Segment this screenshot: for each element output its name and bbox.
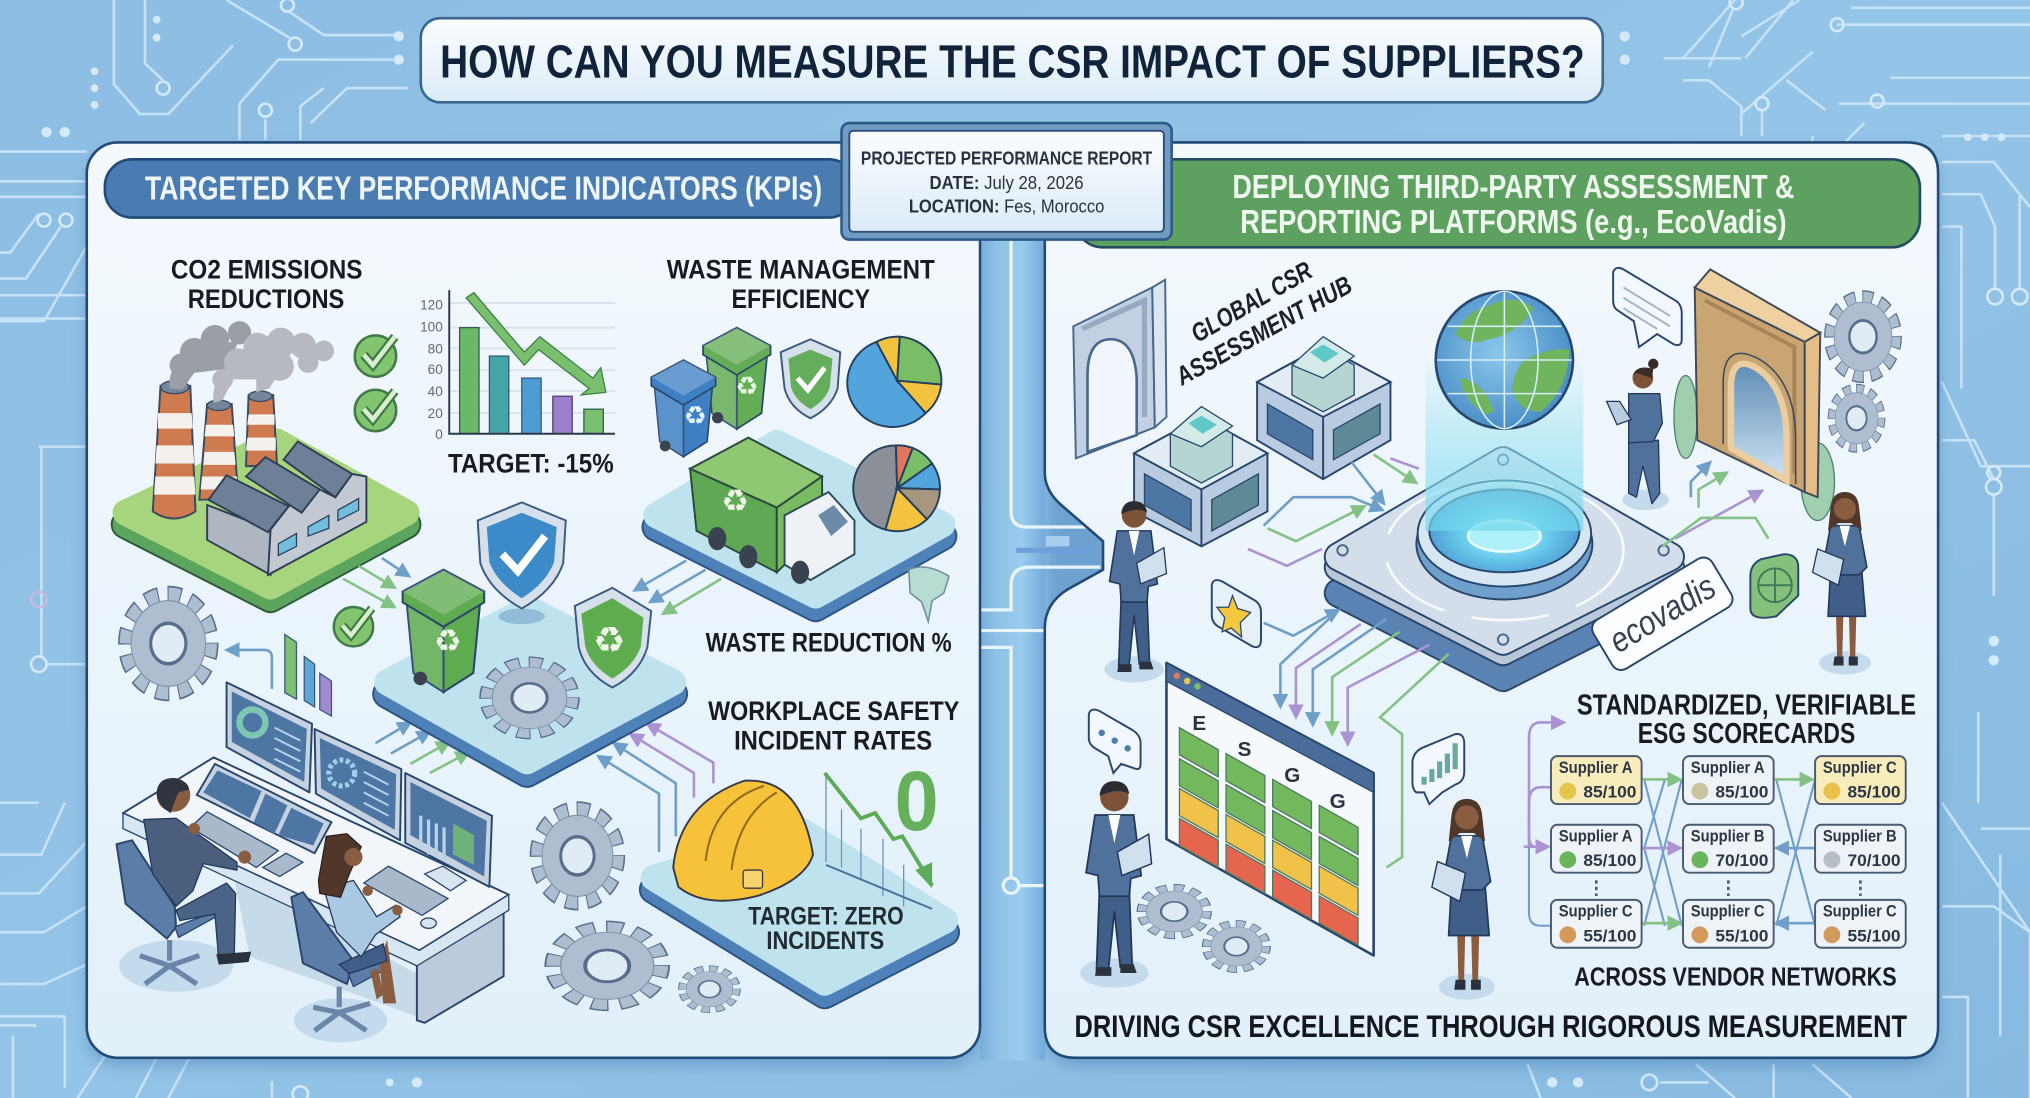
- card: supplier C first: 55/100: [1583, 926, 1636, 945]
- report info box: [842, 123, 1172, 240]
- card: supplier C third: 55/100: [1847, 926, 1901, 945]
- icon: server cube back: [1257, 337, 1390, 479]
- mini bars: [285, 634, 331, 716]
- icon: orange arch: [1695, 269, 1820, 497]
- table: ESG scorecard: S: [1238, 738, 1251, 761]
- icon: recycling bins: [651, 328, 771, 457]
- icon: checks: [355, 335, 396, 431]
- icon: gears top right: [1830, 297, 1896, 447]
- bar chart: 80: [428, 342, 443, 357]
- card: supplier C yellow: Supplier C: [1823, 759, 1897, 777]
- heading: waste management: [667, 253, 935, 314]
- bar chart: 120: [420, 297, 443, 312]
- heading: workplace safety: INCIDENT RATES: [734, 725, 932, 756]
- table: ESG scorecard: G: [1330, 790, 1346, 813]
- icon: truck on blue platform: [656, 438, 942, 607]
- rotated label: global hub: ASSESSMENT HUB: [1171, 271, 1357, 392]
- label: waste reduction: WASTE REDUCTION %: [706, 626, 952, 657]
- heading: waste management: WASTE MANAGEMENT: [667, 253, 935, 284]
- bar chart: 40: [428, 384, 443, 399]
- rotated label: global hub: GLOBAL CSR: [1187, 257, 1317, 348]
- figure: man left: [1104, 501, 1166, 682]
- icon: large gear left: [126, 595, 211, 692]
- icon: platform gear: [487, 663, 572, 733]
- icon: check: [334, 607, 373, 646]
- arrows: servers to hub: [1248, 454, 1419, 566]
- pie chart: waste types: [853, 445, 940, 531]
- icon: green bin: ♻: [434, 623, 462, 659]
- title banner: HOW CAN YOU MEASURE THE CSR IMPACT OF SUPPLIERS?: [440, 36, 1585, 88]
- heading: workplace safety: WORKPLACE SAFETY: [708, 695, 959, 726]
- card: supplier C third: Supplier C: [1823, 903, 1897, 921]
- icon: plants: [1674, 376, 1835, 521]
- card: supplier B green: 70/100: [1715, 851, 1768, 870]
- icon: green bin: [403, 570, 484, 692]
- icon: globe: [1436, 291, 1573, 429]
- heading: CO2 emissions: CO2 EMISSIONS: [171, 253, 363, 284]
- icon: map pin: [909, 567, 949, 622]
- card: supplier B grey: [1815, 825, 1906, 873]
- table: ESG scorecard: E: [1192, 712, 1206, 735]
- icon: star tile: [1212, 580, 1261, 647]
- card: supplier A yellow: Supplier A: [1559, 759, 1633, 777]
- card: supplier A grey: 85/100: [1715, 783, 1768, 802]
- icon: chat bubble: [1089, 710, 1141, 773]
- icon: truck on blue platform: ♻: [721, 483, 749, 519]
- bar chart: 20: [428, 406, 443, 421]
- icon: trend bubble: [1412, 734, 1464, 804]
- icon: server cube front: [1134, 407, 1267, 546]
- heading: CO2 emissions: [171, 253, 362, 314]
- heading: scorecards: ESG SCORECARDS: [1638, 718, 1855, 750]
- heading bar: KPIs: [105, 159, 856, 218]
- title banner: [421, 18, 1603, 102]
- table: ESG scorecard: G: [1284, 764, 1300, 787]
- heading: scorecards: STANDARDIZED, VERIFIABLE: [1577, 690, 1916, 722]
- report info box: LOCATION: Fes, Morocco: [909, 196, 1104, 216]
- central connector channel: [980, 240, 1100, 1060]
- heading: scorecards: [1577, 690, 1916, 750]
- card: supplier C third: [1815, 900, 1906, 948]
- icon: recycling bins: ♻: [735, 372, 759, 402]
- label: across vendor networks: ACROSS VENDOR NETWORKS: [1574, 963, 1897, 991]
- heading: waste management: EFFICIENCY: [731, 283, 870, 314]
- big zero: 0: [895, 754, 939, 848]
- figure: woman right: [1812, 492, 1871, 675]
- card: supplier B green: Supplier B: [1691, 828, 1765, 846]
- card: supplier C yellow: [1815, 756, 1906, 804]
- icon: small gears: [1142, 888, 1266, 969]
- figure: standing woman top: [1607, 359, 1669, 510]
- icon: recycle shield: ♻: [593, 619, 625, 662]
- light beam: [1425, 350, 1583, 531]
- illustration: control desk with operators: [117, 682, 509, 1042]
- card: supplier A yellow: [1551, 756, 1642, 804]
- report info box: PROJECTED PERFORMANCE REPORT: [861, 148, 1152, 168]
- card: supplier C yellow: 85/100: [1847, 783, 1901, 802]
- pie chart: waste share: [847, 337, 941, 427]
- panel: right assessment platforms: [1016, 142, 1938, 1058]
- icon: gears bottom: [537, 810, 736, 1009]
- bar chart: 0: [435, 427, 443, 442]
- icon: grey arch: [1073, 280, 1166, 458]
- card: supplier C second: 55/100: [1715, 926, 1768, 945]
- card: supplier A yellow: 85/100: [1583, 783, 1636, 802]
- icon: speech bubble: [1613, 268, 1682, 347]
- arrows: hub to table: [1264, 610, 1449, 867]
- card: supplier C second: [1683, 900, 1774, 948]
- icon: recycle shield: [575, 588, 651, 688]
- card: supplier A grey: Supplier A: [1691, 759, 1765, 777]
- heading: workplace safety: [708, 695, 959, 756]
- figure: woman bottom: [1432, 799, 1495, 1000]
- card: supplier A green: 85/100: [1583, 851, 1636, 870]
- card: supplier C first: [1551, 900, 1642, 948]
- heading bar: KPIs: TARGETED KEY PERFORMANCE INDICATORS (KPIs): [145, 170, 822, 207]
- supplier scorecards grid: [1551, 756, 1906, 948]
- chart target label: TARGET: -15%: [448, 448, 614, 479]
- card: supplier B grey: Supplier B: [1823, 828, 1897, 846]
- panel: left KPIs: [87, 142, 980, 1058]
- heading bar: platforms: REPORTING PLATFORMS (e.g., EcoVadis): [1240, 204, 1787, 241]
- ecovadis badge: ecovadis: [1602, 567, 1722, 661]
- icon: factory on green platform: [126, 321, 407, 598]
- card: supplier B green: [1683, 825, 1774, 873]
- card: supplier A green: Supplier A: [1559, 828, 1633, 846]
- bar chart: [420, 290, 615, 442]
- report info box: DATE: July 28, 2026: [930, 173, 1084, 193]
- icon: blue shield with tick: [478, 502, 566, 609]
- connector arrows into right panel: [1016, 536, 1098, 550]
- icon: green check shield: [781, 339, 840, 418]
- card: supplier A green: [1551, 825, 1642, 873]
- label: target zero: [748, 903, 904, 955]
- table: ESG scorecard: [1166, 663, 1374, 956]
- bar chart: 60: [428, 362, 443, 377]
- figure: man bottom: [1080, 781, 1152, 988]
- heading bar: platforms: DEPLOYING THIRD-PARTY ASSESSMENT &: [1233, 169, 1794, 206]
- label: target zero: TARGET: ZERO: [748, 903, 904, 930]
- icon: hard hat on safety platform: [654, 773, 945, 994]
- arrows: to central platform: [227, 558, 721, 852]
- card: supplier A grey: [1683, 756, 1774, 804]
- card: supplier B grey: 70/100: [1847, 851, 1901, 870]
- heading: CO2 emissions: REDUCTIONS: [188, 283, 344, 314]
- panel shadows: [87, 150, 1938, 1066]
- icon: hub platform: [1337, 454, 1670, 677]
- icon: globe tile: [1750, 554, 1798, 618]
- card: supplier C first: Supplier C: [1559, 903, 1633, 921]
- icon: central KPI platform: [387, 609, 673, 773]
- label: target zero: INCIDENTS: [766, 928, 884, 955]
- arrows: to arch: [1662, 462, 1768, 546]
- network connection arrows: [1524, 722, 1815, 926]
- card: supplier C second: Supplier C: [1691, 903, 1765, 921]
- icon: recycling bins: ♻: [684, 402, 707, 432]
- heading bar: platforms: [1075, 159, 1920, 247]
- bar chart: 100: [420, 320, 443, 335]
